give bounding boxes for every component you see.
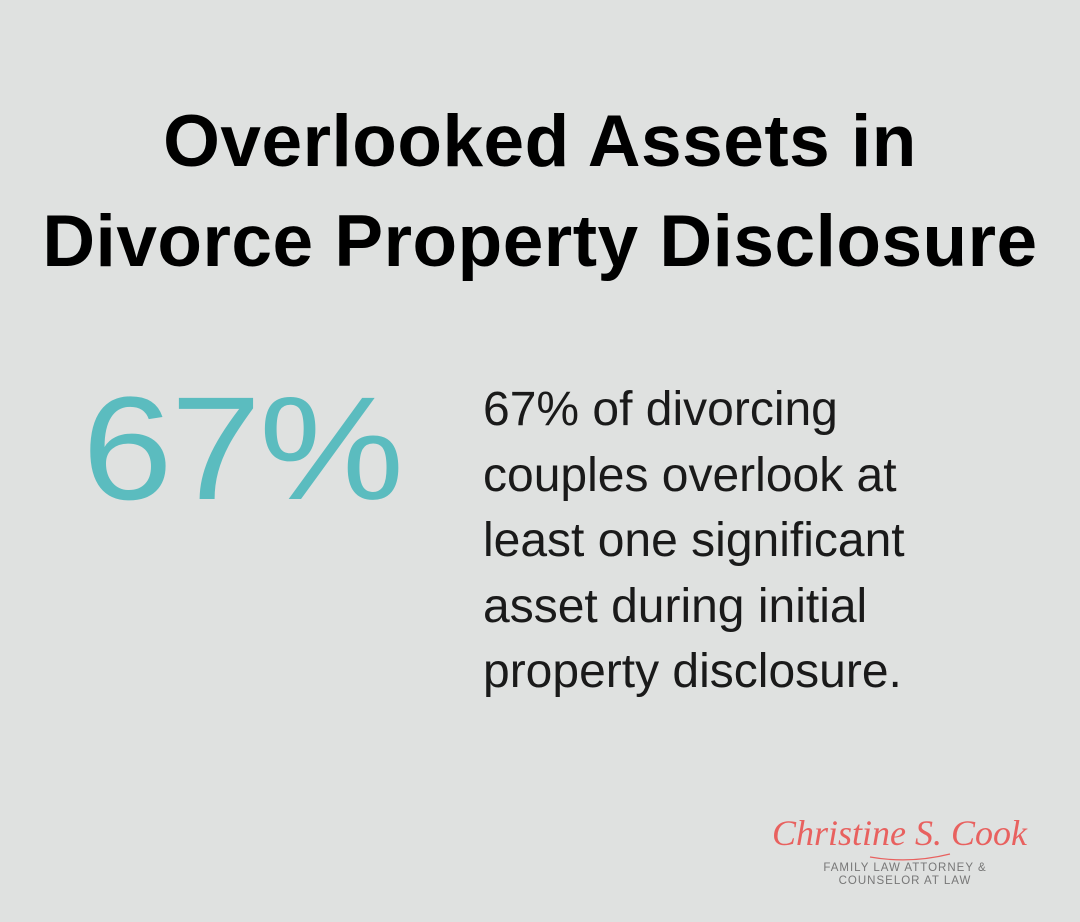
logo: FAMILY LAW ATTORNEY & (823, 862, 987, 874)
title: Overlooked Assets in (163, 101, 917, 182)
description text: asset during initial (483, 580, 867, 632)
description text: least one significant (483, 514, 905, 567)
description text: 67% of divorcing (483, 383, 838, 436)
logo: COUNSELOR AT LAW (839, 875, 971, 887)
logo (772, 813, 1028, 887)
logo: Christine S. Cook (772, 813, 1028, 853)
big stat: 67% (82, 367, 402, 531)
description text: couples overlook at (483, 448, 897, 502)
description text: property disclosure. (483, 645, 902, 698)
title (42, 101, 1038, 282)
title: Divorce Property Disclosure (42, 201, 1038, 282)
description text (483, 383, 905, 698)
